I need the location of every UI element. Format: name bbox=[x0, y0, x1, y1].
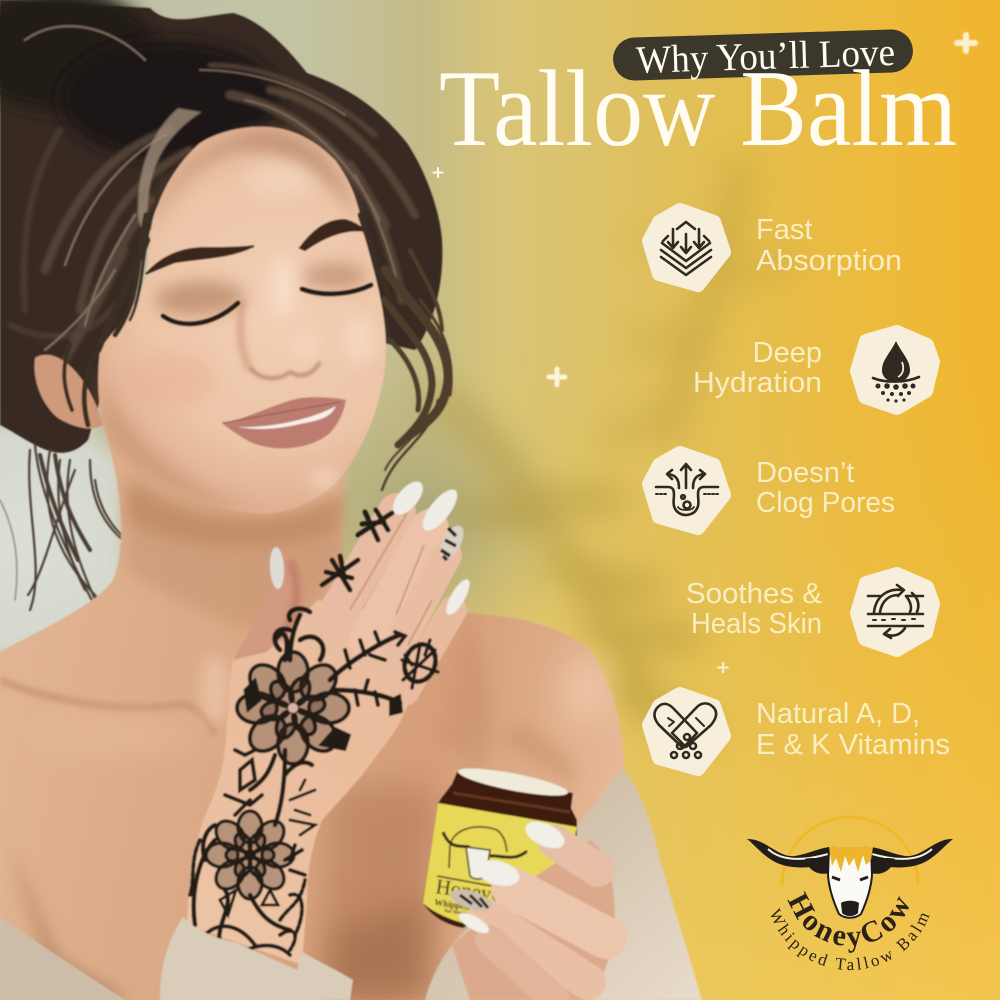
closed eyes bbox=[163, 303, 238, 324]
neck shading bbox=[125, 470, 345, 640]
feature: doesn't clog pores: Doesn’t bbox=[756, 457, 854, 489]
henna: upper flower bbox=[237, 652, 349, 764]
henna bbox=[190, 510, 441, 955]
jar: Whipped bbox=[434, 897, 470, 912]
hair: left wisps bbox=[0, 445, 150, 625]
henna: lower flower bbox=[206, 811, 294, 899]
feature: fast absorption bbox=[649, 210, 902, 285]
feature: natural vitamins bbox=[649, 694, 950, 769]
sweater right bbox=[425, 768, 702, 1000]
henna: branches bbox=[275, 615, 400, 703]
feature: deep hydration: Deep bbox=[753, 337, 822, 369]
feature: deep hydration bbox=[693, 332, 933, 408]
photo: woman holding jar bbox=[0, 0, 702, 1000]
raised hand with henna bbox=[187, 476, 474, 965]
feature: deep hydration: Hydration bbox=[693, 367, 822, 399]
sparkles bbox=[434, 35, 975, 672]
feature: natural vitamins: E & K Vitamins bbox=[756, 729, 950, 761]
feature: doesn't clog pores bbox=[649, 453, 895, 528]
hair: streak at parting bbox=[138, 108, 202, 227]
holding hand bbox=[447, 816, 615, 1000]
icon: pore bbox=[656, 464, 718, 515]
logo: HoneyCow bbox=[747, 816, 953, 970]
sweater cuff bbox=[160, 917, 353, 1000]
title pill: Why You’ll Love bbox=[635, 31, 896, 82]
feature: fast absorption: Fast bbox=[756, 214, 812, 246]
henna: finger motifs bbox=[358, 510, 392, 540]
feature: soothes and heals skin: Soothes & bbox=[686, 578, 822, 610]
icon: layers bbox=[661, 222, 711, 275]
ear bbox=[34, 355, 103, 429]
collarbones and shadows bbox=[0, 680, 215, 735]
icon: water drop bbox=[873, 341, 919, 403]
hair bbox=[0, 0, 451, 625]
eyebrows bbox=[146, 246, 254, 274]
feature: soothes and heals skin: Heals Skin bbox=[691, 608, 822, 640]
sweater left bbox=[0, 917, 125, 1000]
title: Tallow Balm bbox=[439, 48, 957, 169]
hair strands over face bbox=[64, 205, 392, 425]
feature: soothes and heals skin bbox=[686, 574, 933, 650]
feature: doesn't clog pores: Clog Pores bbox=[756, 487, 895, 519]
logo: HoneyCow: HoneyCow bbox=[787, 891, 909, 953]
icon: renewal arrows bbox=[868, 585, 923, 638]
jar: HoneyC bbox=[434, 874, 507, 908]
face bbox=[98, 127, 386, 514]
hair: right lock bbox=[382, 250, 451, 490]
logo: HoneyCow: Whipped Tallow Balm bbox=[770, 908, 930, 970]
hair: left locks bbox=[10, 130, 190, 375]
jar bbox=[423, 763, 577, 928]
feature: natural vitamins: Natural A, D, bbox=[756, 698, 920, 730]
nails bbox=[269, 476, 474, 618]
icon: bull head bbox=[747, 839, 953, 918]
icon: capsules bbox=[655, 703, 716, 758]
body and shoulders bbox=[0, 430, 624, 1000]
hair: crown and right flow bbox=[210, 65, 415, 300]
feature: fast absorption: Absorption bbox=[756, 245, 902, 277]
face shading and features bbox=[100, 130, 376, 510]
lips bbox=[222, 397, 346, 448]
jar: Net Weight bbox=[444, 909, 468, 917]
